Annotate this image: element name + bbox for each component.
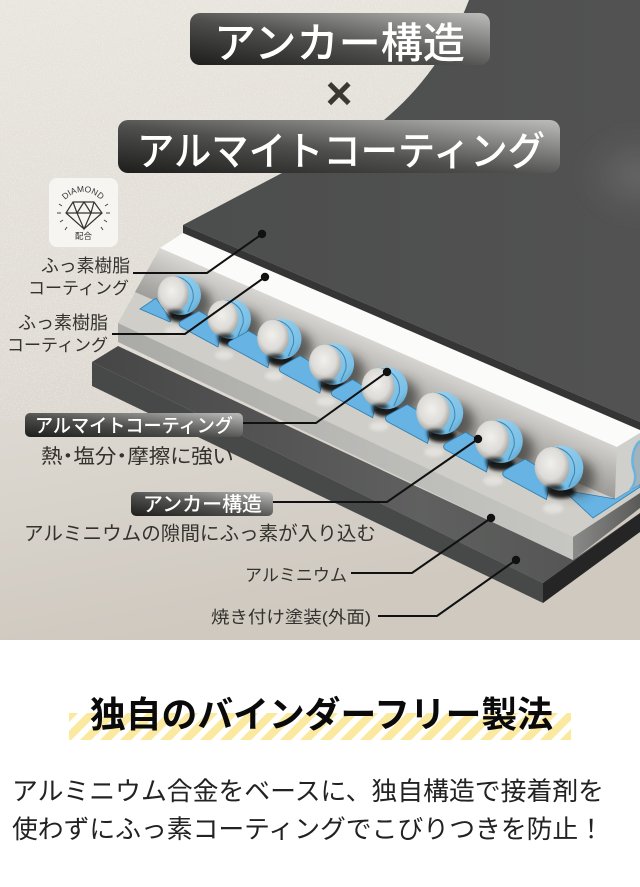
heading with striped highlight: 独自のバインダーフリー製法 — [90, 694, 553, 735]
banner: alumite coating: アルマイトコーティング — [137, 130, 545, 174]
label: anchor structure: アンカー構造 — [143, 493, 262, 516]
background — [0, 0, 640, 640]
layer: blue strip end — [563, 484, 640, 518]
body text — [12, 777, 604, 844]
badge: diamond: DIAMOND — [62, 186, 104, 200]
body text: アルミニウム合金をベースに、独自構造で接着剤を — [12, 777, 604, 806]
label: fluorine resin coating 1: コーティング — [28, 279, 129, 298]
leader line 2 — [112, 273, 269, 334]
striped highlight — [69, 713, 571, 740]
label: fluorine resin coating 2: コーティング — [7, 336, 108, 355]
label: baked coating exterior: 焼き付け塗装(外面) — [211, 608, 371, 627]
label: fluorine resin coating 1 — [28, 256, 130, 298]
label: fluorine resin coating 2 — [7, 313, 108, 355]
layer: white fluorine coating — [160, 233, 640, 499]
layer: baked outer coating — [92, 346, 640, 603]
leader line 5 — [351, 514, 495, 573]
label: fluorine resin coating 1: ふっ素樹脂 — [41, 256, 130, 276]
badge: diamond — [49, 178, 118, 247]
leader line 3 — [243, 368, 391, 423]
banner: anchor structure: アンカー構造 — [214, 20, 465, 67]
body text: 使わずにふっ素コーティングでこびりつきを防止！ — [12, 815, 604, 844]
multiplication sign: × — [326, 67, 352, 119]
text: fluorine enters aluminium gaps: アルミニウムの隙間にふっ素が入り込む — [24, 523, 376, 545]
badge: diamond: 配合 — [75, 231, 92, 241]
label: aluminium: アルミニウム — [245, 566, 347, 585]
dark coated pan surface — [183, 0, 640, 422]
label: fluorine resin coating 2: ふっ素樹脂 — [18, 313, 108, 333]
layered cross-section diagram — [92, 225, 640, 603]
leader line 1 — [133, 230, 266, 273]
layer: top dark plate edge — [183, 225, 640, 430]
leader line 6 — [378, 556, 520, 616]
label: alumite coating: アルマイトコーティング — [35, 415, 233, 437]
white lower section — [0, 640, 640, 887]
layer: aluminium — [118, 248, 640, 560]
text: strong against heat, salt, friction: 熱・塩分・摩擦に強い — [41, 445, 233, 468]
anchor balls — [140, 275, 595, 513]
leader line 4 — [273, 435, 482, 502]
